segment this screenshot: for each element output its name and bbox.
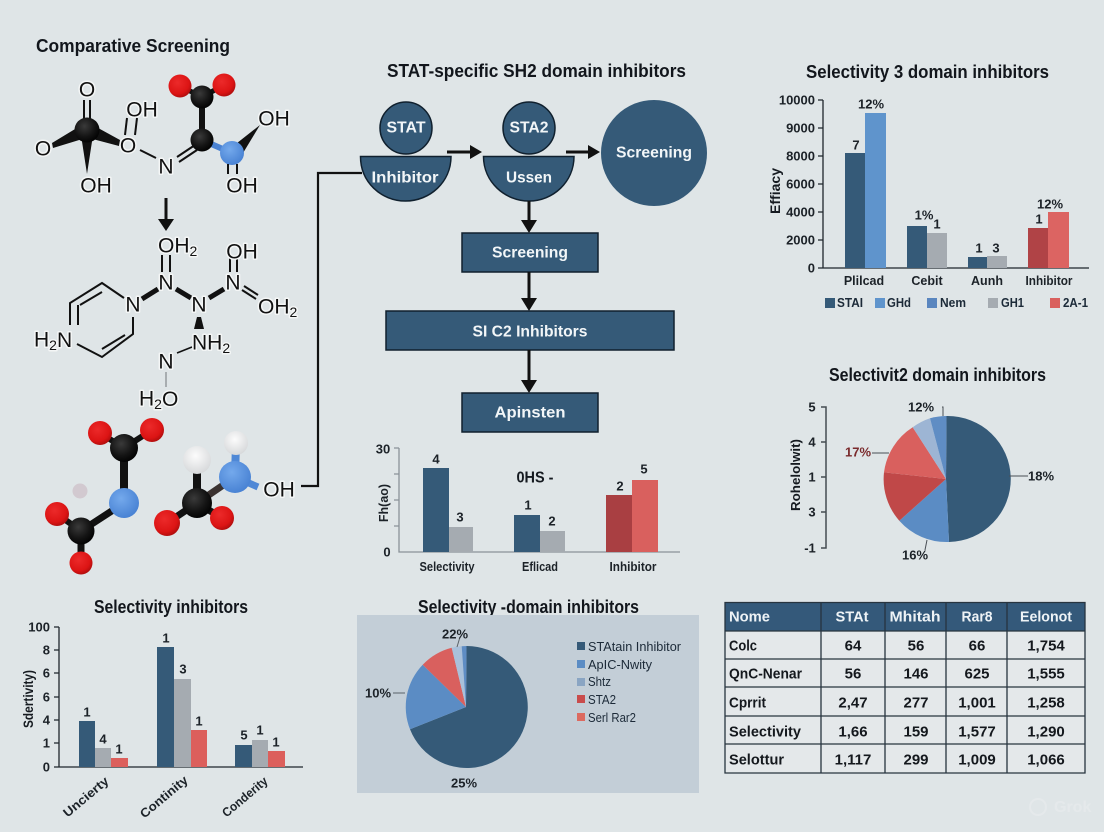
bar chart: selectivity 3 domain inhibitors: 3	[992, 240, 1000, 256]
arrow: inhibitor to STA2	[447, 145, 482, 159]
pie chart panel: selectivity domain inhibitors: 22%	[442, 626, 468, 642]
node: ussen bowl	[484, 156, 574, 201]
bar chart: selectivity efficacy inhibitor	[376, 442, 680, 574]
node: apinsten box: Apinsten	[494, 404, 566, 422]
bar chart: selectivity 3 domain inhibitors: 2000	[786, 232, 815, 248]
bar chart: selectivity efficacy inhibitor: Selectivity	[420, 560, 475, 574]
data table: 159	[903, 724, 929, 740]
bar chart: selectivity 3 domain inhibitors: Aunh	[971, 274, 1003, 288]
data table: 1,001	[958, 694, 996, 712]
node: STA2 circle: STA2	[510, 120, 549, 136]
bar chart: selectivity 3 domain inhibitors: 4000	[786, 204, 815, 220]
data table: Mhitah	[890, 608, 940, 626]
molecule: top structure: OH	[126, 98, 158, 122]
data table: QnC-Nenar	[729, 666, 802, 682]
molecule: top structure: O	[79, 78, 95, 102]
bar chart: selectivity efficacy inhibitor: Eflicad	[522, 560, 558, 574]
pie chart: selectivity 2 domain inhibitors: Rohelolwit)	[789, 439, 803, 511]
bar chart: selectivity 3 domain inhibitors: Plilcad	[844, 274, 884, 288]
node: SH2 inhibitors box: SI C2 Inhibitors	[472, 324, 588, 340]
molecule: ball-and-stick right	[154, 431, 295, 536]
bar chart: selectivity inhibitors: 6	[43, 690, 50, 704]
pie chart: selectivity 2 domain inhibitors: 3	[808, 504, 816, 520]
pie chart panel: selectivity domain inhibitors: 25%	[451, 776, 477, 790]
molecule: middle structure: 2	[49, 337, 57, 353]
molecule: ball-and-stick left	[45, 418, 164, 574]
legend	[577, 640, 681, 725]
data table: Colc	[729, 638, 757, 654]
arrow: SH2 box to apinsten box	[521, 350, 537, 393]
legend	[825, 296, 1088, 310]
bar chart: selectivity inhibitors: 1	[115, 742, 123, 756]
pie chart panel: selectivity domain inhibitors	[357, 597, 699, 793]
data table: Selectivity	[729, 724, 802, 740]
data table: Eelonot	[1020, 608, 1072, 626]
panel: comparative screening molecules	[34, 36, 298, 574]
pie chart: selectivity 2 domain inhibitors: 17%	[845, 444, 871, 460]
bar chart: selectivity 3 domain inhibitors: 9000	[786, 120, 815, 136]
legend: STA2	[588, 693, 616, 707]
bar chart: selectivity 3 domain inhibitors: Inhibitor	[1026, 274, 1073, 288]
bar chart: selectivity 3 domain inhibitors: Effiacy	[767, 168, 783, 214]
arrow: ussen to screening circle	[566, 145, 600, 159]
molecule: top structure	[35, 74, 290, 198]
legend: Serl Rar2	[588, 711, 636, 725]
bar chart: selectivity inhibitors: 8	[43, 642, 50, 658]
molecule: middle structure: N	[158, 272, 174, 294]
bar chart: selectivity 3 domain inhibitors: 6000	[786, 176, 815, 192]
data table: 2,47	[838, 694, 868, 712]
bar chart: selectivity 3 domain inhibitors: 7	[852, 138, 860, 152]
node: screening box: Screening	[492, 244, 568, 262]
bar chart: selectivity 3 domain inhibitors: 12%	[858, 96, 884, 112]
molecule: middle structure: N	[125, 294, 141, 316]
molecule: middle structure: OH	[158, 234, 190, 258]
data table: 1,258	[1027, 694, 1065, 712]
bar chart: selectivity 3 domain inhibitors: 10000	[779, 92, 815, 108]
molecule: middle structure	[34, 234, 298, 412]
molecule: middle structure: N	[57, 328, 72, 352]
arrow: screening box to SH2 box	[521, 272, 537, 311]
bar chart: selectivity efficacy inhibitor: 0	[383, 544, 391, 560]
bar chart: selectivity inhibitors: Continity	[137, 773, 191, 821]
heading: selectivity inhibitors: Selectivity inhibitors	[94, 597, 248, 617]
molecule: ball-and-stick right: OH	[263, 478, 295, 502]
bar chart: selectivity inhibitors: 5	[240, 728, 248, 742]
data table: 1,555	[1027, 666, 1065, 682]
pie chart: selectivity 2 domain inhibitors: 5	[808, 400, 816, 414]
bar chart: selectivity efficacy inhibitor: 4	[432, 452, 440, 466]
node: inhibitor bowl: Inhibitor	[372, 170, 438, 186]
bar chart: selectivity 3 domain inhibitors	[767, 62, 1089, 310]
pie chart: selectivity 2 domain inhibitors: 12%	[908, 400, 934, 414]
pie chart: selectivity 2 domain inhibitors: 4	[808, 434, 816, 450]
bar chart: selectivity inhibitors: Conderity	[219, 774, 271, 820]
molecule: middle structure: OH	[258, 296, 290, 318]
node: STAT circle: STAT	[386, 120, 426, 136]
heading: selectivit2 domain inhibitors: Selectivit2 domain inhibitors	[829, 365, 1046, 385]
bar chart: selectivity 3 domain inhibitors: 8000	[786, 148, 815, 164]
data table: 56	[845, 666, 861, 682]
legend: STAtain Inhibitor	[588, 640, 681, 654]
bar chart: selectivity inhibitors: Uncierty	[60, 774, 112, 820]
molecule: middle structure: 2	[290, 304, 298, 320]
bar chart: selectivity inhibitors: 4	[43, 712, 51, 728]
molecule: middle structure: N	[225, 272, 241, 294]
molecule: middle structure: NH	[192, 332, 222, 354]
molecule: top structure: OH	[226, 174, 258, 198]
data table: 56	[908, 638, 924, 654]
data table: Selottur	[729, 752, 784, 768]
bar chart: selectivity inhibitors: 4	[99, 732, 107, 746]
node: apinsten box	[462, 393, 598, 432]
molecule: top structure: OH	[258, 108, 290, 130]
watermark: grok	[1030, 799, 1091, 816]
node: screening circle: Screening	[616, 144, 692, 162]
bar chart: selectivity efficacy inhibitor: 3	[456, 510, 464, 524]
bar chart: selectivity inhibitors: 1	[195, 714, 203, 728]
molecule: top structure: O	[35, 138, 51, 160]
bar chart: selectivity inhibitors: 1	[43, 736, 50, 750]
data table: Rar8	[962, 608, 992, 626]
bar chart: selectivity inhibitors: 1	[272, 734, 280, 750]
legend: GH1	[1001, 296, 1024, 310]
molecule: middle structure: N	[158, 350, 174, 374]
pie chart: selectivity 2 domain inhibitors: -1	[804, 540, 816, 556]
molecule: middle structure: OH	[226, 240, 258, 264]
arrow: ussen down to screening box	[521, 201, 537, 233]
node: STAT circle	[380, 102, 432, 154]
data table: Cprrit	[729, 694, 766, 712]
pie chart: selectivity 2 domain inhibitors	[789, 365, 1054, 562]
legend: STAI	[837, 296, 863, 310]
watermark: grok: Grok	[1054, 799, 1091, 816]
bar chart: selectivity 3 domain inhibitors: 1	[975, 240, 983, 256]
bar chart: selectivity 3 domain inhibitors: 1%	[915, 208, 934, 222]
pie chart: selectivity 2 domain inhibitors: 16%	[902, 548, 928, 562]
bar chart: selectivity inhibitors	[20, 597, 303, 821]
panel: flowchart	[360, 61, 707, 432]
data table: 64	[845, 638, 862, 654]
bar chart: selectivity 3 domain inhibitors: 12%	[1037, 196, 1063, 212]
data table: 1,009	[958, 752, 996, 768]
legend: Nem	[940, 296, 966, 310]
data table: STAt	[836, 608, 868, 626]
bar chart: selectivity 3 domain inhibitors: 1	[1035, 212, 1043, 226]
bar chart: selectivity efficacy inhibitor: 5	[640, 462, 648, 476]
node: inhibitor bowl	[360, 156, 451, 201]
bar chart: selectivity efficacy inhibitor: 1	[524, 498, 532, 512]
legend: ApIC-Nwity	[588, 658, 653, 672]
data table: 146	[903, 666, 929, 682]
bar chart: selectivity inhibitors: 0	[43, 760, 50, 774]
molecule: middle structure: H	[34, 328, 49, 352]
heading: selectivity domain inhibitors: Selectivity -domain inhibitors	[418, 597, 639, 617]
node: STA2 circle	[503, 102, 555, 154]
data table: 1,117	[835, 752, 871, 768]
data table: 1,66	[838, 724, 868, 740]
data table: 1,066	[1027, 752, 1065, 768]
molecule: middle structure: 2	[154, 396, 162, 412]
molecule: middle structure: H	[139, 388, 154, 410]
pie chart: selectivity 2 domain inhibitors: 18%	[1028, 468, 1054, 484]
bar chart: selectivity efficacy inhibitor: Inhibitor	[610, 560, 657, 574]
data table: 625	[964, 666, 990, 682]
node: screening box	[462, 233, 598, 272]
legend: 2A-1	[1063, 296, 1088, 310]
bar chart: selectivity 3 domain inhibitors: 1	[933, 216, 941, 232]
molecule: middle structure: 2	[190, 243, 198, 259]
molecule: middle structure: O	[162, 388, 178, 410]
arrow: molecule step down	[158, 198, 174, 231]
node: ussen bowl: Ussen	[506, 170, 552, 186]
molecule: top structure: O	[120, 134, 136, 158]
heading: flowchart title: STAT-specific SH2 domain inhibitors	[387, 61, 686, 81]
arrow: connector from molecule to flowchart	[301, 173, 362, 486]
molecule: middle structure: N	[191, 294, 207, 316]
bar chart: selectivity inhibitors: 1	[83, 704, 91, 720]
bar chart: selectivity inhibitors: 1	[162, 630, 170, 646]
bar chart: selectivity 3 domain inhibitors: Cebit	[911, 274, 943, 288]
data table: 277	[903, 694, 929, 712]
data table	[725, 602, 1085, 773]
bar chart: selectivity efficacy inhibitor: 30	[376, 442, 390, 456]
bar chart: selectivity inhibitors: Sdertivity)	[20, 670, 36, 728]
molecule: middle structure: 2	[222, 340, 230, 356]
bar chart: selectivity inhibitors: 6	[43, 666, 50, 680]
bar chart: selectivity efficacy inhibitor: 2	[616, 478, 624, 494]
bar chart: selectivity 3 domain inhibitors: 0	[808, 260, 815, 276]
data table: 1,754	[1027, 638, 1065, 654]
legend: Shtz	[588, 675, 611, 689]
heading: comparative screening: Comparative Screening	[36, 36, 230, 56]
heading: selectivity 3 domain inhibitors: Selectivity 3 domain inhibitors	[806, 62, 1049, 82]
bar chart: selectivity inhibitors: 1	[256, 722, 264, 738]
data table: Nome	[729, 608, 770, 626]
node: SH2 inhibitors box	[386, 311, 674, 350]
bar chart: selectivity inhibitors: 100	[28, 620, 50, 634]
molecule: top structure: N	[158, 156, 174, 178]
bar chart: selectivity efficacy inhibitor: 2	[548, 514, 556, 528]
data table: 1,290	[1027, 724, 1065, 740]
legend: GHd	[887, 296, 911, 310]
pie chart: selectivity 2 domain inhibitors: 1	[808, 470, 816, 484]
node: screening circle	[601, 100, 707, 206]
pie chart panel: selectivity domain inhibitors: 10%	[365, 686, 391, 700]
data table: 299	[903, 752, 929, 768]
bar chart: selectivity inhibitors: 3	[179, 662, 187, 676]
data table: 1,577	[958, 724, 996, 740]
molecule: top structure: OH	[80, 174, 112, 198]
data table: 66	[969, 638, 985, 654]
bar chart: selectivity efficacy inhibitor: 0HS -	[516, 470, 554, 486]
bar chart: selectivity efficacy inhibitor: Fh(ao)	[377, 484, 391, 522]
